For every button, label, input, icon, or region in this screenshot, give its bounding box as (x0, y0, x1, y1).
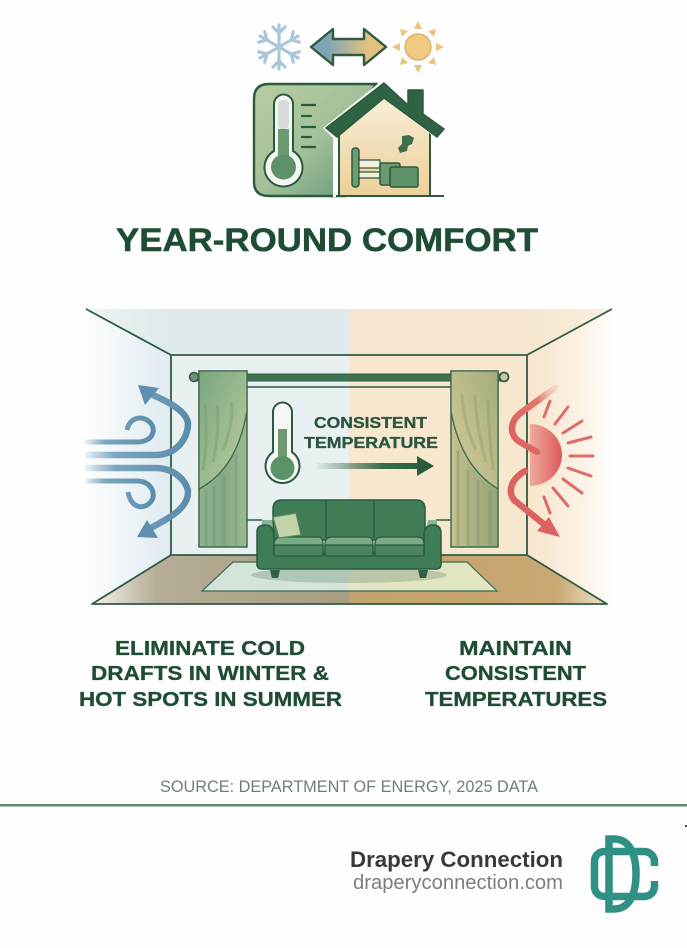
consistent temperature label: CONSISTENT (314, 415, 427, 432)
text: maintain temperatures (425, 637, 607, 711)
panel: room illustration (84, 309, 612, 606)
title: YEAR-ROUND COMFORT (116, 222, 538, 258)
footer brand: draperyconnection.com (353, 872, 563, 894)
consistent temperature label: TEMPERATURE (304, 435, 438, 452)
icon: double arrow (311, 29, 386, 65)
text: eliminate drafts: HOT SPOTS IN SUMMER (79, 688, 342, 711)
wall thermometer (266, 402, 300, 483)
heat sun (530, 401, 593, 513)
plant (398, 135, 414, 153)
consistent temperature label (304, 415, 438, 452)
house interior (333, 90, 435, 197)
bed (352, 148, 418, 187)
logo (594, 839, 654, 909)
text: eliminate drafts: DRAFTS IN WINTER & (91, 662, 329, 685)
roof (323, 79, 447, 139)
cold wind arrows (85, 385, 188, 538)
text: maintain temperatures: CONSISTENT (445, 662, 587, 685)
cold side wall (84, 309, 171, 606)
source: SOURCE: DEPARTMENT OF ENERGY, 2025 DATA (160, 778, 538, 796)
window sill lines (247, 387, 451, 520)
left curtain (199, 371, 247, 547)
card thermometer (264, 94, 315, 186)
right curtain (451, 371, 498, 547)
warm side wall (527, 309, 612, 606)
heat arrows (511, 388, 560, 537)
sofa (251, 500, 447, 583)
ceiling (86, 309, 612, 355)
curtain rod (190, 372, 508, 382)
icon: thermostat card and house (254, 79, 447, 197)
top icons: cold to heat (257, 21, 444, 73)
footer brand (350, 847, 563, 894)
rug (202, 562, 497, 591)
footer divider (0, 804, 687, 806)
icon: sun (392, 21, 444, 73)
card (254, 84, 376, 196)
text: maintain temperatures: MAINTAIN (459, 637, 572, 660)
floor (92, 555, 607, 604)
icon: snowflake (257, 25, 301, 69)
text: maintain temperatures: TEMPERATURES (425, 688, 607, 711)
temperature arrow (317, 456, 434, 476)
corner speck (685, 825, 687, 827)
text: eliminate drafts (79, 637, 342, 711)
back wall (171, 355, 527, 555)
text: eliminate drafts: ELIMINATE COLD (115, 637, 305, 660)
footer brand: Drapery Connection (350, 847, 563, 872)
room outlines (86, 309, 612, 604)
